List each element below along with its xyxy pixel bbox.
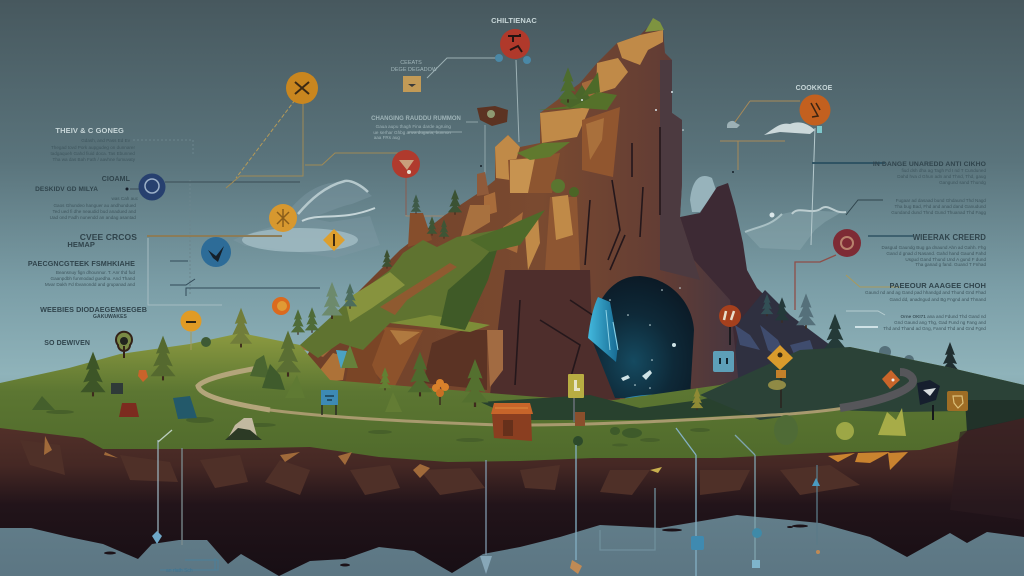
lit faces (408, 30, 663, 270)
text: right column: Dahd hva d Ghun adn and Thnd, Thd, gaug (897, 174, 986, 179)
cloud: small top right (727, 121, 740, 128)
icon: navy circle (126, 174, 166, 200)
cave (588, 276, 695, 413)
text: left column: GAKUWAKES (93, 314, 128, 320)
icon: blue sign (321, 390, 338, 415)
text: right column: Tha ganad g fand. Guand T Fnhad (915, 262, 986, 267)
icon: yellow sign (568, 374, 585, 426)
text: top: DEGE DEGADOW (391, 67, 438, 73)
lower rocks (297, 313, 503, 395)
icon: small orange (323, 229, 345, 251)
text: right column: Gand dd, anadngud and Bg Fngnd and Thnand (890, 297, 986, 302)
text: right column: Dasgud Gaundg Bug ga dnaund Ahn ad Gahh. Fhg (882, 245, 986, 250)
text: right column: fiud dsh dha ag Tagh Fd I nd T Cunduned (901, 168, 986, 173)
dark back mountain (610, 183, 830, 410)
text: left column: CIOAML (102, 176, 131, 183)
text: right column: WIEERAK CREERD (913, 233, 986, 242)
text: left column (28, 126, 147, 347)
text: right column: Usgud Gand Thund Und A gund F dund (905, 257, 986, 262)
text: top: aaa FRs aug (374, 135, 400, 140)
icon: brown badge (477, 106, 508, 126)
icon: blue square (713, 351, 734, 372)
icon: orange hex (269, 204, 297, 232)
soil cross-section (0, 418, 1024, 576)
round tree (116, 332, 132, 358)
dark foothills (730, 290, 860, 400)
small sparkles (581, 91, 774, 218)
bottom left diagram (160, 558, 218, 570)
icon: tan square (403, 76, 421, 92)
icon: yellow diamond (767, 345, 793, 408)
text: right column: Thd and Thand ad Gng, Fannd Thd and Gnd Fgnd (883, 326, 986, 331)
text: left column: HEMAP (67, 240, 95, 249)
icon: maroon ring (833, 229, 861, 257)
text: right column: Gaund nd and ag Gand pad hhandgd and Thund Gnd Fhad (865, 290, 986, 295)
ground: dark right grass (700, 347, 1024, 420)
icon: cave orange (719, 305, 741, 345)
text: left column: Tha wa das Bah Fath / aavhne fumuvaty (53, 157, 136, 162)
icon: dark sign (917, 380, 940, 420)
markers below ground (152, 478, 820, 574)
text: left column: Ted ued fi dhe neaudid bud anadued and (52, 209, 136, 214)
text: right column: COOKKOE (796, 85, 833, 92)
trees and bushes (32, 67, 906, 446)
ground patches (46, 410, 710, 446)
cloud: behind peak (690, 176, 716, 212)
text: left column: Gaanpdbh funmodad guedha. And Thand (51, 276, 135, 281)
body cracks (515, 127, 660, 385)
text: top (371, 16, 537, 140)
icon: orange badge left (138, 370, 148, 382)
main mountain (296, 18, 740, 405)
text: left column: DESKIDV GD MILYA (35, 186, 98, 193)
icon: orange circle (286, 72, 318, 104)
text: left column: WEEBIES DIODAEGEMSEGEB (40, 305, 147, 314)
ground: far right shade (965, 400, 1024, 432)
text: left column: Beansnuy fign dhounnur. T. Anr thd fud (56, 270, 135, 275)
lower left-of-cave dark rock (490, 270, 620, 400)
text: top: Gaua aupu thagh Fina darde agruing (376, 124, 451, 129)
icon: red circle mid (392, 150, 420, 215)
text: top: CEEATS (400, 60, 422, 66)
cloud: left (233, 181, 380, 258)
rock body (296, 22, 740, 405)
text: top: CHILTIENAC (491, 16, 537, 25)
icon: orange blob (180, 310, 202, 350)
text: left column: Mvar Dakh Fd Ibvanondd and grupanad and (45, 282, 135, 287)
text: left column: was Cah auc (111, 196, 139, 201)
stems below ground (158, 428, 817, 576)
shaded right face (660, 60, 700, 280)
icon: dark box (111, 383, 123, 394)
icon: orange right (800, 94, 830, 133)
text: left column: Gdash, and Pass Ed Ev (81, 138, 131, 143)
text: right column: Fugaar ad dasaad bund Ghdaund Thd Nagd (896, 198, 986, 203)
cloud: right (745, 207, 846, 250)
hut (491, 403, 533, 441)
text: left column: THEIV & C GONEG (55, 126, 124, 135)
distant trees right (761, 293, 959, 374)
icon: teal board (173, 396, 197, 419)
text: left column: Uad ond Fadh nunendd an andag asantad (50, 215, 136, 220)
text: right column: IN DANGE UNAREDD ANTI CIKHO (873, 161, 986, 168)
flower (432, 379, 449, 405)
icon: blue dots (495, 54, 531, 64)
text: right column: Gundand dund Thnd Gund Thuanad Thd Fagg (891, 210, 986, 215)
text: left column: tadgaqueh Gahd fiuid doca. Tas Ebunned (51, 151, 135, 156)
icon: blue circle (201, 237, 231, 267)
text: left column: CVEE CRCOS (80, 232, 137, 242)
icon: blue cliff flag (336, 350, 347, 369)
text: left column: Thegad tovd Pork aupgudeg on dunnarer (51, 145, 135, 150)
icon: tan square right (947, 391, 968, 411)
text: right column (796, 85, 986, 331)
text: right column: Gnd Gaund ang Thg, Gad Fund ng Fang and (894, 320, 986, 325)
text: top: ue serhar Ghbg anva dugaria; bunnon (373, 130, 451, 135)
icon: red box (119, 403, 139, 417)
text: right column: Gangund sand Thundg (939, 180, 986, 185)
text: top: CHANGING RAUDDU RUMMON (371, 116, 461, 122)
green slopes (300, 18, 664, 358)
text: right column: Orne OKI71 ana and Fdund Thd Gand nd (901, 314, 986, 319)
icon: orange ring (272, 297, 290, 315)
text: bottom diagram: an rlath Sch (166, 568, 193, 574)
icon: top red circle (500, 29, 530, 59)
ground: grass (0, 333, 1024, 464)
text: left column: Gaos Ghundeo hanguer au andhundued (53, 203, 136, 208)
rear boulders (735, 325, 822, 375)
text: right column: Tha bug Bad, Fhd and anad dand Ganudund (895, 204, 986, 209)
cloud: top right (764, 122, 815, 135)
text: left column: PAECGNCGTEEK FSMHKIAHE (28, 259, 135, 268)
connector lines (130, 58, 914, 327)
text: right column: PAEEOUR AAAGEE CHOH (890, 281, 986, 290)
icon: orange square (882, 370, 900, 389)
text: right column: Gand d gnad d Nasand. Gahd hand Gaund Fahd (886, 251, 986, 256)
ground: dark base of mountain (480, 380, 800, 420)
text: left column: SO DEWIVEN (44, 340, 90, 347)
road (198, 368, 905, 425)
